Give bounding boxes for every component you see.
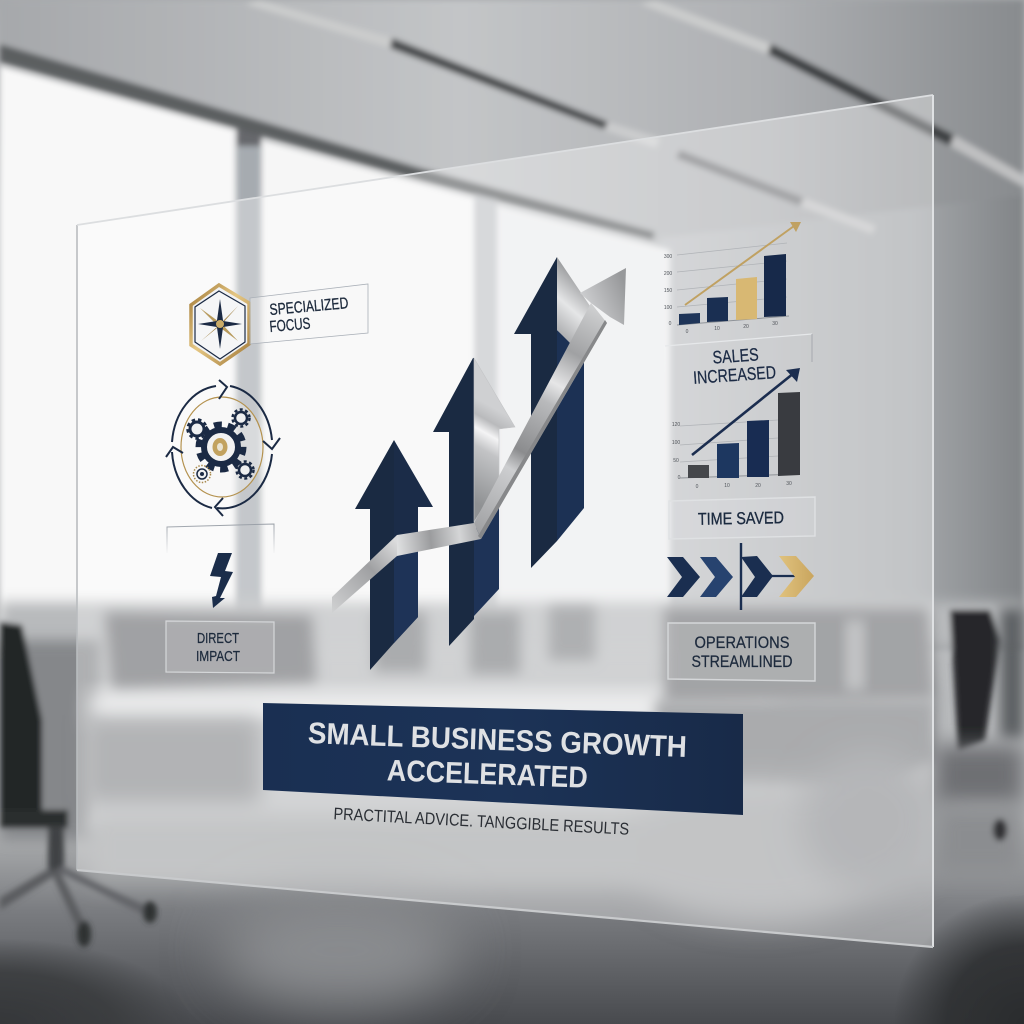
bar chart: sales, gold trend: 200 [664,271,672,277]
label: operations streamlined [668,623,815,681]
label: sales increased [665,334,812,388]
gold arrow [685,222,801,305]
icon: process chevrons [667,543,814,610]
label: operations streamlined: STREAMLINED [692,652,792,671]
label: direct impact: DIRECT [197,631,239,647]
label: time saved: TIME SAVED [698,508,784,529]
arrow 2 [433,358,515,646]
label: time saved [669,497,815,539]
silver trend arrow [332,268,626,613]
bar chart: time saved, navy trend: 30 [786,481,792,487]
growth arrows [355,257,590,670]
icon: gear cycle [166,380,280,516]
icon: lightning bolt [210,553,233,608]
bar chart: time saved, navy trend: 50 [673,458,679,464]
empty label frame [167,524,274,553]
label: operations streamlined: OPERATIONS [694,633,790,652]
small gears [188,410,254,482]
bar chart: sales, gold trend: 0 [686,329,689,335]
bar chart: time saved, navy trend: 20 [755,483,761,489]
bar chart: sales, gold trend [664,222,801,335]
label: sales increased: INCREASED [692,362,777,388]
label: specialized focus [250,284,368,344]
bar chart: sales, gold trend: 300 [664,254,672,260]
navy arrow [692,368,800,455]
bar chart: time saved, navy trend: 0 [696,484,699,490]
bar chart: sales, gold trend: 20 [743,324,749,330]
bar chart: time saved, navy trend: 100 [672,440,680,446]
bar chart: sales, gold trend: 30 [772,321,778,327]
subtitle: PRACTITAL ADVICE. TANGGIBLE RESULTS [333,804,630,839]
bar chart: time saved, navy trend: 120 [672,422,680,428]
bar chart: time saved, navy trend: 0 [678,475,681,481]
arrow 3 [514,257,590,568]
bar chart: time saved, navy trend: 10 [724,483,730,489]
bar chart: sales, gold trend: 150 [664,288,672,294]
label: direct impact: IMPACT [196,649,240,665]
central gear [198,424,244,470]
title banner [263,703,743,815]
bar chart: sales, gold trend: 100 [664,305,672,311]
label: sales increased: SALES [712,344,759,368]
label: direct impact [166,621,274,673]
label: specialized focus: SPECIALIZED [269,295,349,319]
title banner: ACCELERATED [386,754,588,795]
bar chart: sales, gold trend: 0 [669,321,672,327]
title banner: SMALL BUSINESS GROWTH [307,717,687,764]
bar chart: sales, gold trend: 10 [714,326,720,332]
arrow 1 [355,440,433,670]
icon: hexagon compass [191,285,249,364]
glass panel [77,95,933,947]
dark chairs [0,622,42,812]
label: specialized focus: FOCUS [269,315,311,336]
bar chart: time saved, navy trend [672,368,800,490]
